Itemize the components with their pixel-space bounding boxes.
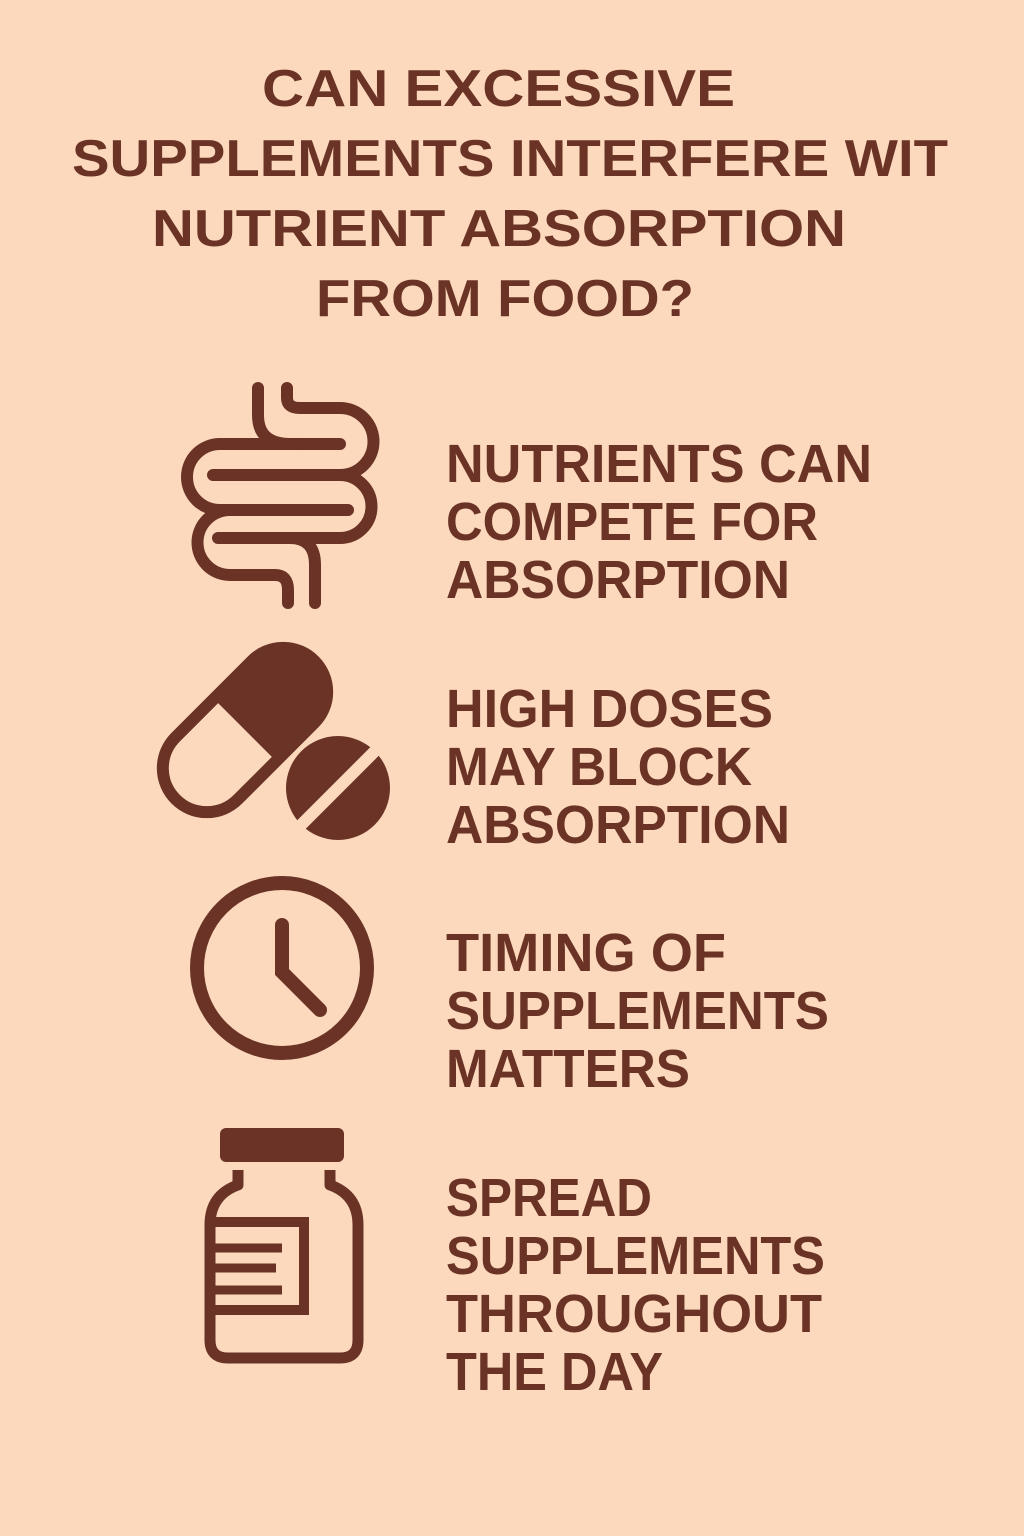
title bbox=[72, 60, 948, 328]
text: spread: SPREAD bbox=[446, 1168, 652, 1228]
icon: clock bbox=[197, 883, 367, 1053]
text: high doses: MAY BLOCK bbox=[446, 737, 752, 797]
text: timing: MATTERS bbox=[446, 1039, 690, 1099]
text: nutrients compete: ABSORPTION bbox=[446, 550, 790, 610]
title: FROM FOOD? bbox=[316, 270, 694, 328]
text: spread: SUPPLEMENTS bbox=[446, 1226, 825, 1286]
text: timing bbox=[446, 923, 829, 1099]
text: nutrients compete: NUTRIENTS CAN bbox=[446, 434, 872, 494]
text: spread: THROUGHOUT bbox=[446, 1284, 822, 1344]
icon: pills bbox=[145, 630, 390, 840]
text: timing: SUPPLEMENTS bbox=[446, 981, 829, 1041]
text: nutrients compete: COMPETE FOR bbox=[446, 492, 818, 552]
text: high doses: HIGH DOSES bbox=[446, 679, 773, 739]
text: spread bbox=[446, 1168, 825, 1402]
icon: bottle bbox=[210, 1128, 358, 1358]
text: high doses bbox=[446, 679, 790, 855]
text: timing: TIMING OF bbox=[446, 923, 726, 983]
text: spread: THE DAY bbox=[446, 1342, 663, 1402]
title: NUTRIENT ABSORPTION bbox=[152, 200, 846, 258]
title: CAN EXCESSIVE bbox=[262, 60, 735, 118]
text: high doses: ABSORPTION bbox=[446, 795, 790, 855]
text: nutrients compete bbox=[446, 434, 872, 610]
icon: intestine bbox=[187, 388, 374, 603]
title: SUPPLEMENTS INTERFERE WIT bbox=[72, 130, 948, 188]
